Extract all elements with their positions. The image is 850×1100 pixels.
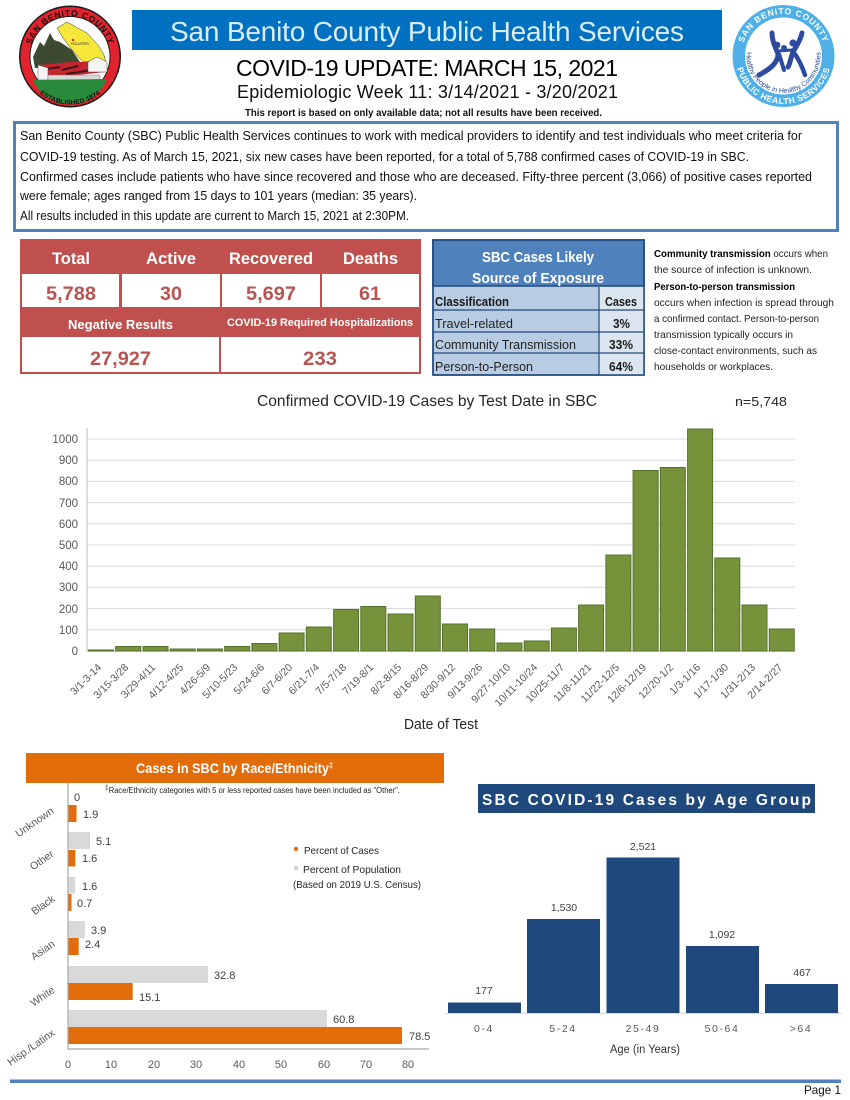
text block: transmission definitions: transmission typically occurs in [654, 329, 793, 341]
y axis labels: 500 [59, 540, 78, 552]
banner: department title: San Benito County Public Health Services [170, 16, 684, 47]
footnote: ‡ [105, 785, 109, 792]
value labels: 1.6 [82, 881, 97, 893]
panel: case totals table: 30 [160, 284, 182, 305]
age ticks: 5-24 [549, 1023, 577, 1035]
panel: case totals table: Deaths [343, 249, 398, 268]
x axis labels: 6/7-6/20 [259, 662, 295, 697]
panel: summary text [14, 122, 838, 230]
x axis ticks [65, 1059, 414, 1071]
x axis labels: 5/24-6/6 [231, 662, 267, 697]
x axis ticks: 30 [190, 1059, 202, 1071]
panel: summary text: Confirmed cases include patients who have since recovered and those who are deceased. Fifty-three percent (3,066) of positive cases reported [20, 169, 812, 184]
footer rule [10, 1080, 841, 1083]
value labels: 1.6 [82, 853, 97, 865]
value labels: 3.9 [91, 925, 106, 937]
x axis labels: 9/13-9/26 [445, 662, 485, 701]
category labels: Black [29, 893, 58, 918]
panel: summary text: were female; ages ranged from 15 days to 101 years (median: 35 years). [19, 188, 417, 203]
icon: Public Health Services logo: SAN BENITO COUNTY [738, 8, 829, 42]
title: update date: COVID-19 UPDATE: MARCH 15, 2021 [236, 55, 618, 81]
panel: likely source of exposure table: 33% [609, 337, 633, 352]
subtitle: epidemiologic week: Epidemiologic Week 11: 3/14/2021 - 3/20/2021 [237, 82, 618, 102]
panel: summary text: San Benito County (SBC) Public Health Services continues to work with medical providers to identify and test individuals who meet criteria for [20, 128, 803, 143]
icon: Public Health Services logo [732, 5, 834, 107]
x axis ticks: 40 [233, 1059, 245, 1071]
panel: case totals table: Active [146, 249, 196, 268]
value labels [74, 792, 430, 1043]
y axis labels: 300 [59, 582, 78, 594]
x axis labels: 2/14-2/27 [745, 662, 785, 701]
value labels: 32.8 [214, 970, 235, 982]
text block: transmission definitions [654, 248, 834, 373]
panel: case totals table: 5,788 [46, 284, 96, 305]
x axis ticks: 80 [402, 1059, 414, 1071]
x axis labels: 9/27-10/10 [469, 662, 513, 706]
panel: case totals table: Total [52, 249, 90, 268]
panel: case totals table: 5,697 [246, 284, 296, 305]
value labels: 177 [475, 985, 493, 997]
panel: case totals table: 233 [303, 349, 337, 370]
panel: likely source of exposure table: Classification [435, 294, 509, 309]
panel: cases by age group [445, 784, 842, 1056]
panel: likely source of exposure table: Travel-related [435, 316, 513, 331]
panel: likely source of exposure table: 3% [613, 316, 630, 331]
x axis labels: 10/11-10/24 [493, 662, 540, 709]
x axis labels: 7/5-7/18 [313, 662, 349, 697]
x axis labels: 6/21-7/4 [286, 662, 322, 697]
age ticks [474, 1023, 812, 1035]
y axis labels: 800 [59, 476, 78, 488]
x axis ticks: 10 [105, 1059, 117, 1071]
x axis labels: 1/3-1/16 [667, 662, 703, 697]
panel: case totals table: 27,927 [90, 349, 151, 370]
value labels: 1,092 [709, 929, 735, 941]
value labels [475, 841, 811, 997]
value labels: 60.8 [333, 1014, 354, 1026]
panel: likely source of exposure table: 64% [609, 359, 633, 374]
y axis labels: 0 [72, 646, 78, 658]
x axis labels: 12/6-12/19 [605, 662, 649, 706]
category labels: White [28, 984, 57, 1009]
panel: likely source of exposure table: Community Transmission [435, 337, 576, 352]
panel: likely source of exposure table: SBC Cases Likely [482, 249, 595, 266]
text block: transmission definitions: Person-to-person transmission [654, 281, 795, 293]
heading [26, 753, 444, 783]
legend: Percent of Cases [304, 845, 379, 857]
x axis labels: 1/31-2/13 [718, 662, 758, 701]
panel: likely source of exposure table: Cases [605, 294, 637, 309]
panel: case totals table [20, 239, 421, 374]
heading: Cases in SBC by Race/Ethnicity [136, 760, 348, 776]
category labels: Asian [29, 938, 57, 963]
x axis ticks: 0 [65, 1059, 71, 1071]
age ticks: 50-64 [705, 1023, 739, 1035]
age ticks: 25-49 [626, 1023, 660, 1035]
x axis labels [68, 662, 785, 709]
note: report disclaimer: This report is based on only available data; not all results have been received. [245, 108, 602, 119]
x axis labels: 12/20-1/2 [636, 662, 676, 701]
y axis labels: 600 [59, 519, 78, 531]
category labels: Hisp./Latinx [5, 1027, 58, 1068]
y axis labels: 1000 [52, 434, 78, 446]
x axis ticks: 70 [360, 1059, 372, 1071]
text block: transmission definitions: the source of infection is unknown. [654, 264, 812, 276]
age ticks: 0-4 [474, 1023, 494, 1035]
x axis labels: 10/25-11/7 [524, 662, 567, 705]
age ticks: >64 [790, 1023, 812, 1035]
y axis labels: 400 [59, 561, 78, 573]
text block: transmission definitions: a confirmed contact. Person-to-person [654, 313, 819, 325]
page number: Page 1 [804, 1083, 841, 1097]
x axis labels: 3/29-4/11 [119, 662, 158, 701]
y axis labels: 200 [59, 604, 78, 616]
x axis labels: 4/26-5/9 [177, 662, 213, 697]
category labels: Other [28, 848, 57, 873]
x axis labels: 1/17-1/30 [691, 662, 731, 701]
green bars [88, 429, 794, 651]
value labels: 1,530 [551, 902, 577, 914]
sample size: n=5,748 [735, 395, 787, 409]
banner: department title [132, 10, 722, 50]
icon: Public Health Services logo: Healthy People in Healthy Communities [746, 52, 820, 93]
chart title: Confirmed COVID-19 Cases by Test Date in SBC [257, 393, 597, 410]
panel: summary text: COVID-19 testing. As of March 15, 2021, six new cases have been reported, for a total of 5,788 confirmed cases of COVID-19 in SBC. [20, 149, 749, 164]
text block: transmission definitions: close-contact environments, such as [654, 345, 817, 357]
text block: transmission definitions: occurs when infection is spread through [654, 297, 834, 309]
x axis labels: 7/19-8/1 [340, 662, 376, 697]
x axis ticks: 60 [318, 1059, 330, 1071]
panel: case totals table: Negative Results [68, 317, 173, 332]
y axis labels: 100 [59, 625, 78, 637]
panel: case totals table: COVID-19 Required Hospitalizations [227, 317, 413, 329]
x axis labels: 11/22-12/5 [579, 662, 622, 705]
panel: case totals table: Recovered [229, 249, 313, 268]
value labels: 5.1 [96, 836, 111, 848]
panel: cases by race and ethnicity [5, 753, 444, 1071]
footnote: Race/Ethnicity categories with 5 or less reported cases have been included as "Other". [109, 786, 400, 795]
value labels: 0 [74, 792, 80, 804]
value labels: 2.4 [85, 939, 100, 951]
legend: (Based on 2019 U.S. Census) [293, 879, 421, 891]
x axis labels: 11/8-11/21 [551, 662, 594, 705]
gray population bars [68, 832, 327, 1027]
y axis labels [52, 434, 78, 658]
x axis labels: 3/1-3-14 [68, 662, 104, 698]
x axis title: Date of Test [404, 717, 478, 733]
x axis labels: 4/12-4/25 [146, 662, 186, 701]
heading [478, 784, 815, 813]
chart: confirmed cases by test date [52, 393, 795, 733]
category labels: Unknown [13, 805, 56, 840]
heading: SBC COVID-19 Cases by Age Group [482, 792, 811, 809]
x axis labels: 8/16-8/29 [391, 662, 431, 701]
value labels: 1.9 [83, 809, 98, 821]
category labels [5, 805, 58, 1068]
text block: transmission definitions: households or workplaces. [654, 361, 773, 373]
value labels: 15.1 [139, 992, 160, 1004]
legend [293, 845, 421, 891]
x axis ticks: 50 [275, 1059, 287, 1071]
x axis labels: 8/2-8/15 [368, 662, 404, 697]
icon: San Benito County seal: ESTABLISHED 1874 [40, 90, 100, 104]
icon: San Benito County seal [19, 6, 121, 108]
panel: summary text: All results included in this update are current to March 15, 2021 at 2:30PM. [20, 208, 409, 223]
icon: San Benito County seal: HOLLISTER [71, 42, 90, 46]
panel: likely source of exposure table [433, 240, 644, 375]
heading: ‡ [329, 761, 333, 770]
icon: San Benito County seal: SAN BENITO COUNTY [26, 10, 114, 44]
value labels: 2,521 [630, 841, 656, 853]
x axis labels: 5/10-5/23 [200, 662, 240, 701]
blue bars [448, 858, 838, 1013]
panel: case totals table: 61 [359, 284, 381, 305]
x axis ticks: 20 [148, 1059, 160, 1071]
value labels: 467 [793, 967, 811, 979]
value labels: 0.7 [77, 898, 92, 910]
x axis title: Age (in Years) [610, 1044, 680, 1056]
y axis labels: 900 [59, 455, 78, 467]
panel: likely source of exposure table: Source of Exposure [472, 270, 604, 287]
value labels: 78.5 [409, 1031, 430, 1043]
panel: likely source of exposure table: Person-to-Person [435, 359, 533, 374]
icon: Public Health Services logo: PUBLIC HEALTH SERVICES [737, 67, 830, 104]
orange case bars [68, 805, 402, 1044]
y axis labels: 700 [59, 498, 78, 510]
x axis labels: 8/30-9/12 [418, 662, 458, 701]
x axis labels: 3/15-3/28 [91, 662, 131, 701]
text block: transmission definitions: Community transmission occurs when [654, 248, 828, 260]
legend: Percent of Population [303, 864, 401, 876]
